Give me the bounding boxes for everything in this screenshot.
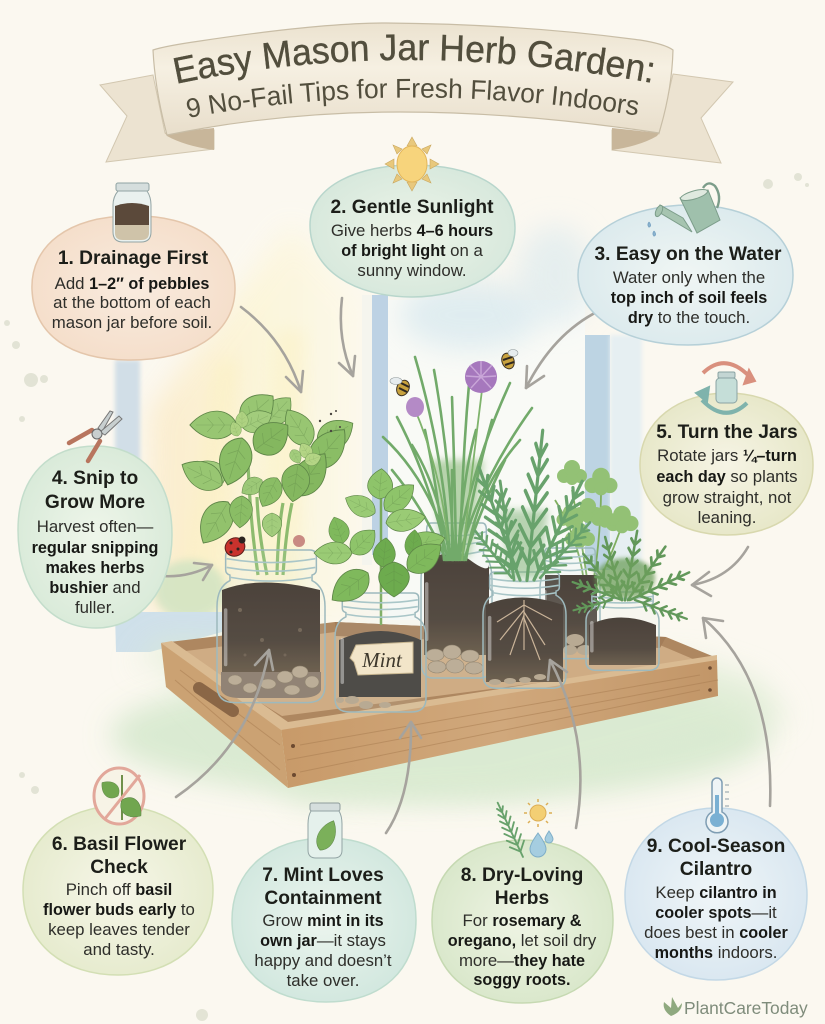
arrow: tip 8 xyxy=(548,660,580,828)
icon: thermometer xyxy=(706,778,729,833)
arrow: tip 2 xyxy=(339,298,355,376)
mint label xyxy=(350,642,413,675)
body text: at the bottom of each xyxy=(53,293,211,312)
icon: rotating jar xyxy=(696,363,755,413)
body text: of bright light on a xyxy=(341,241,483,260)
body text: fuller. xyxy=(75,598,115,617)
body text: Keep cilantro in xyxy=(655,883,777,902)
body text: oregano, let soil dry xyxy=(448,931,596,950)
panel: tip 9 cilantro xyxy=(625,778,807,980)
icon: jar with pebbles xyxy=(113,183,151,242)
panel: tip 1 drainage xyxy=(32,183,235,360)
basil jar and plant xyxy=(176,385,360,703)
body text: sunny window. xyxy=(357,261,467,280)
body text: Harvest often— xyxy=(37,517,154,536)
heading: 4. Snip to xyxy=(52,468,138,489)
thyme jar and plant xyxy=(571,530,692,670)
body text: leaning. xyxy=(698,508,756,527)
body text: Rotate jars ¼–turn xyxy=(657,446,797,465)
heading: Cilantro xyxy=(680,859,752,880)
body text: Grow mint in its xyxy=(262,911,384,930)
rosemary jar and plant xyxy=(467,429,598,688)
body text: and tasty. xyxy=(83,940,155,959)
icon: sprig, sun and drop xyxy=(491,799,553,860)
cilantro jar and plant xyxy=(540,460,638,659)
arrow: tip 3 xyxy=(526,308,605,388)
heading: 6. Basil Flower xyxy=(52,834,187,855)
arrow: tip 7 xyxy=(386,722,421,833)
body text: take over. xyxy=(287,971,359,990)
bees xyxy=(390,350,518,398)
body text: happy and doesn’t xyxy=(254,951,392,970)
body text: does best in cooler xyxy=(644,923,788,942)
panel: tip 3 water xyxy=(578,183,793,345)
icon: no flowers xyxy=(94,768,147,824)
heading: Herbs xyxy=(495,888,549,909)
panel: tip 8 dry loving xyxy=(432,799,613,1003)
heading: Check xyxy=(90,857,148,878)
heading: 3. Easy on the Water xyxy=(595,244,782,265)
heading: 2. Gentle Sunlight xyxy=(330,197,494,218)
body text: cooler spots—it xyxy=(655,903,777,922)
icon: sun xyxy=(385,137,439,191)
heading: 5. Turn the Jars xyxy=(656,422,798,443)
chives jar and plant xyxy=(383,350,532,678)
arrow: tip 1 xyxy=(241,307,303,392)
panel: tip 6 basil flower xyxy=(23,768,213,975)
icon: watering can xyxy=(648,183,720,236)
body text: flower buds early to xyxy=(43,900,195,919)
heading: 1. Drainage First xyxy=(58,248,209,269)
title text: Easy Mason Jar Herb Garden: xyxy=(174,34,654,84)
body text: own jar—it stays xyxy=(260,931,386,950)
body text: regular snipping xyxy=(32,539,158,557)
heading: Grow More xyxy=(45,492,145,513)
icon: pruners xyxy=(69,411,122,461)
heading: Containment xyxy=(264,888,382,909)
body text: Add 1–2″ of pebbles xyxy=(55,274,209,293)
body text: For rosemary & xyxy=(463,911,581,930)
body text: more—they hate xyxy=(459,951,585,970)
icon: jar with leaf xyxy=(308,803,342,858)
wooden tray xyxy=(161,622,718,788)
arrow: tip 9 xyxy=(703,618,770,806)
ladybug xyxy=(222,535,305,559)
body text: Pinch off basil xyxy=(66,880,172,899)
heading: 8. Dry-Loving xyxy=(461,865,583,886)
body text: mason jar before soil. xyxy=(52,313,212,332)
panel: tip 2 sunlight xyxy=(310,137,515,297)
body text: top inch of soil feels xyxy=(611,289,767,307)
body text: months indoors. xyxy=(655,943,777,962)
body text: keep leaves tender xyxy=(48,920,190,939)
subtitle text: 9 No-Fail Tips for Fresh Flavor Indoors xyxy=(186,78,638,118)
window scene xyxy=(115,225,642,652)
body text: bushier and xyxy=(49,578,141,597)
arrow: tip 5 xyxy=(692,547,748,596)
chive flowers xyxy=(406,361,497,417)
panel: tip 5 turn xyxy=(640,363,813,535)
arrow: tip 4 xyxy=(152,563,212,580)
table surface xyxy=(110,640,790,805)
roots xyxy=(497,600,552,660)
mint label: Mint xyxy=(361,648,403,672)
body text: each day so plants xyxy=(656,467,798,486)
watermark: PlantCareToday xyxy=(684,998,808,1018)
arrow: tip 6 xyxy=(176,650,273,797)
body text: Water only when the xyxy=(613,268,765,287)
heading: 9. Cool-Season xyxy=(647,836,785,857)
body text: Give herbs 4–6 hours xyxy=(331,221,493,240)
panel: tip 4 snip xyxy=(18,411,172,628)
title banner xyxy=(99,22,734,164)
body text: soggy roots. xyxy=(473,971,571,989)
body text: dry to the touch. xyxy=(628,308,750,327)
body text: makes herbs xyxy=(46,559,144,577)
body text: grow straight, not xyxy=(663,488,792,507)
aphid specks xyxy=(319,410,341,432)
heading: 7. Mint Loves xyxy=(262,865,384,886)
mint jar and plant xyxy=(314,468,449,712)
panel: tip 7 mint xyxy=(232,803,416,1002)
